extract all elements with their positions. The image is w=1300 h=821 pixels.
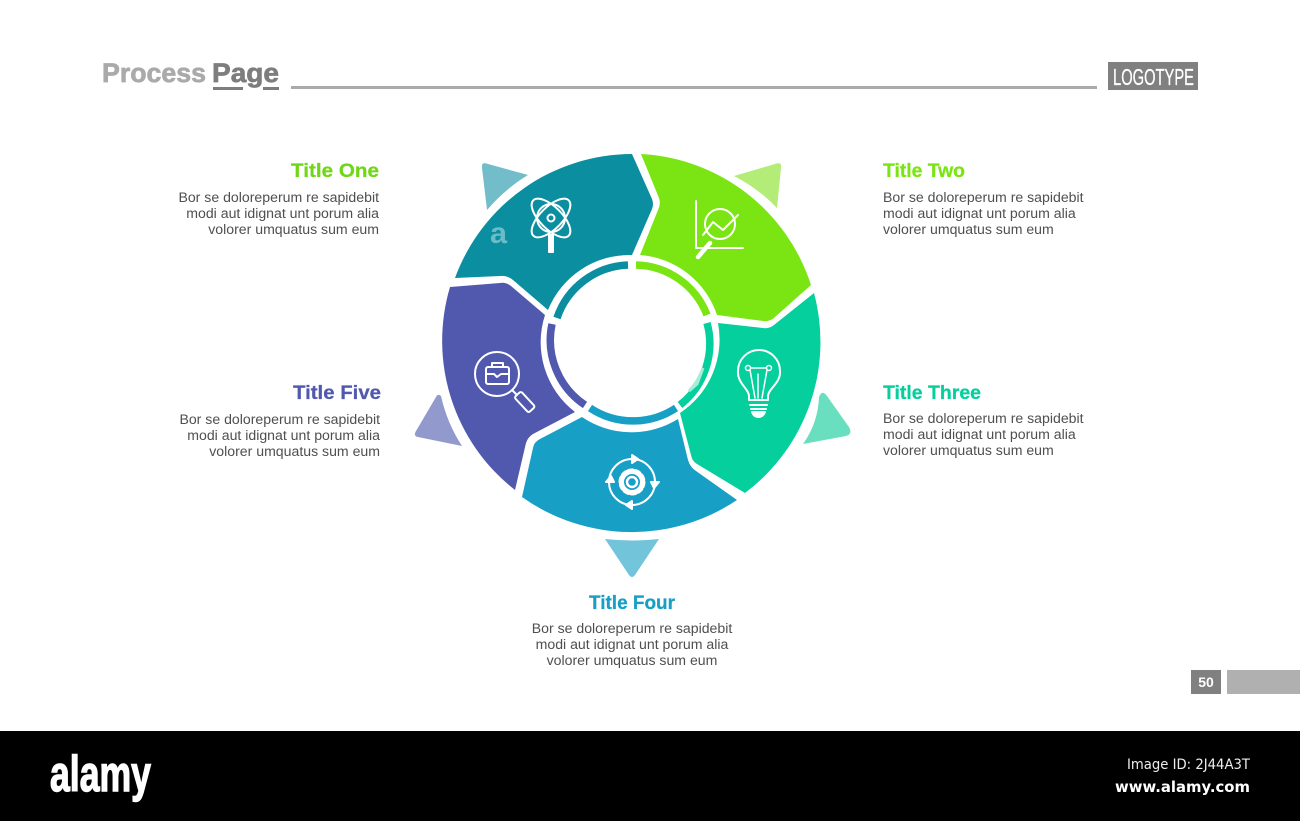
text block three: Bor se doloreperum re sapidebit [883, 410, 1084, 426]
page number [1191, 670, 1221, 694]
triangle pointer five [415, 395, 462, 446]
segment shape one [455, 154, 653, 310]
icon: light bulb [738, 350, 780, 417]
text block two: modi aut idignat unt porum alia [883, 205, 1076, 221]
title five: Title Five [293, 382, 381, 404]
segment shape four [522, 417, 737, 532]
segment shape five [442, 283, 575, 490]
title two: Title Two [883, 160, 965, 182]
ring arc one [557, 265, 628, 318]
triangle pointer three [803, 393, 850, 444]
heading: Process Page [102, 58, 279, 90]
text block two: Bor se doloreperum re sapidebit [883, 189, 1084, 205]
logotype badge: LOGOTYPE [1113, 64, 1194, 90]
website: www.alamy.com [1115, 778, 1250, 796]
page number: 50 [1198, 674, 1214, 690]
hub watermark smear [689, 368, 703, 391]
text block five: volorer umquatus sum eum [209, 443, 380, 459]
triangle pointer one [482, 163, 528, 210]
text block one: volorer umquatus sum eum [208, 221, 379, 237]
text block five [179, 411, 380, 459]
text block one: modi aut idignat unt porum alia [186, 205, 379, 221]
icon: gear with arrows [606, 455, 659, 509]
triangle pointer two [734, 163, 781, 208]
text block four [532, 620, 732, 668]
triangle pointer four [605, 539, 659, 577]
icon: atom with magnifier [526, 193, 576, 252]
footer brand: alamy [50, 746, 151, 802]
segment shape three [680, 293, 820, 493]
icon: briefcase magnifier [475, 352, 535, 413]
icon: chart with magnifier [696, 201, 743, 257]
title four: Title Four [589, 592, 675, 614]
text block three: volorer umquatus sum eum [883, 442, 1054, 458]
text block five: modi aut idignat unt porum alia [187, 427, 380, 443]
text block five: Bor se doloreperum re sapidebit [179, 411, 380, 427]
image id: Image ID: 2J44A3T [1127, 757, 1250, 773]
heading: Process Page: Page [212, 58, 279, 88]
ring arc two [636, 265, 707, 315]
watermark letter: a [490, 217, 507, 250]
panel: segment three [680, 293, 1084, 493]
text block two: volorer umquatus sum eum [883, 221, 1054, 237]
text block one [178, 189, 379, 237]
text block four: volorer umquatus sum eum [547, 652, 717, 668]
text block two [883, 189, 1084, 237]
panel: segment two [636, 154, 1084, 321]
ring arc four [590, 408, 676, 421]
panel: segment four [522, 408, 737, 668]
panel: segment five [179, 283, 585, 490]
text block four: Bor se doloreperum re sapidebit [532, 620, 732, 636]
segment shape two [640, 154, 811, 321]
heading: Process Page: Process [102, 58, 206, 88]
text block three [883, 410, 1084, 458]
text block one: Bor se doloreperum re sapidebit [178, 189, 379, 205]
title one: Title One [291, 160, 379, 182]
logotype badge [1108, 62, 1198, 90]
footer band [0, 731, 1300, 821]
ring arc three [680, 323, 710, 405]
panel: segment one [178, 154, 653, 318]
ring arc five [550, 324, 585, 405]
text block four: modi aut idignat unt porum alia [536, 636, 729, 652]
text block three: modi aut idignat unt porum alia [883, 426, 1076, 442]
title three: Title Three [883, 382, 981, 404]
